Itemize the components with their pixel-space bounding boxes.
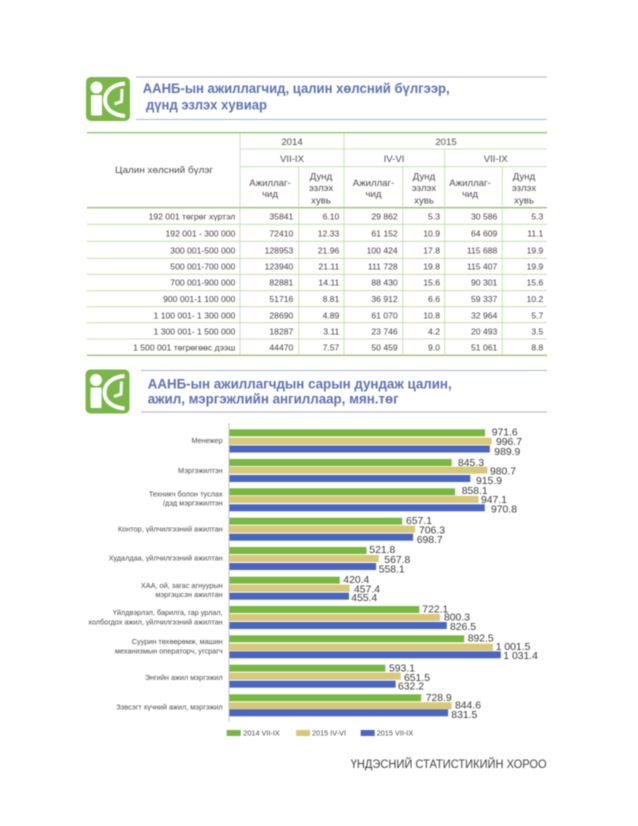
table header: Дунд (513, 171, 536, 182)
table rows: 9.0 (428, 343, 440, 353)
table rows: 19.9 (527, 262, 544, 272)
table header: 2014 (281, 137, 303, 148)
table rows: 19.8 (423, 262, 440, 272)
blue bars 2015 VII-IX (230, 446, 501, 716)
table header: Ажиллаг- (449, 178, 491, 189)
category labels: мэргэшсэн ажилтан (156, 590, 223, 599)
value labels: 826.5 (450, 622, 476, 633)
table header: IV-VI (384, 154, 404, 165)
table rows: 900 001-1 100 000 (163, 294, 236, 304)
table rows: 32 964 (471, 310, 498, 320)
table rows: 300 001-500 000 (170, 246, 236, 256)
tan bars 2015 IV-VI (230, 438, 493, 709)
category labels: холбогдох ажил, үйлчилгээний ажилтан (88, 618, 223, 626)
table header: Ажиллаг- (249, 178, 291, 189)
table header: чид (462, 189, 478, 200)
category labels: Менежер (191, 436, 223, 445)
table rows: 4.89 (323, 310, 340, 320)
category labels: Суурин төхөөрөмж, машин (132, 637, 223, 646)
wage bracket table (87, 133, 547, 355)
footer: source organisation: ҮНДЭСНИЙ СТАТИСТИКИЙН ХОРОО (351, 758, 547, 771)
value labels (343, 428, 538, 721)
value labels: 844.6 (455, 700, 481, 712)
table header: чид (262, 189, 278, 200)
table header: Дунд (413, 171, 436, 182)
value labels: 989.9 (494, 447, 521, 458)
table rows: 35841 (269, 212, 294, 222)
category labels: Үйлдвэрлэл, барилга, гар урлал, (113, 608, 223, 617)
table rows: 18287 (269, 326, 294, 336)
category labels: Худалдаа, үйлчилгээний ажилтан (109, 554, 223, 562)
table rows: 4.2 (428, 326, 440, 336)
value labels: 651.5 (404, 673, 430, 684)
table rows: 36 912 (371, 294, 398, 304)
table header: Дунд (310, 171, 333, 182)
table rows: 51716 (269, 294, 294, 304)
table rows: 72410 (269, 229, 294, 239)
category labels: ХАА, ой, загас агнуурын (141, 581, 223, 590)
value labels: 558.1 (379, 564, 405, 576)
table rows: 5.3 (531, 212, 544, 222)
category labels: Техникч болон туслах (149, 490, 223, 498)
table header: VII-IX (484, 154, 508, 165)
table header: хувь (414, 195, 434, 206)
value labels: 970.8 (491, 504, 517, 516)
title 1: ААНБ-ын ажиллагчид, цалин хөлсний бүлгээр, (143, 80, 450, 96)
table rows: 12.33 (318, 229, 340, 239)
table header: 2015 (435, 137, 457, 148)
logo icon 1 (86, 77, 130, 121)
table rows: 59 337 (471, 294, 498, 304)
table rows: 30 586 (471, 212, 498, 222)
table rows: 1 100 001- 1 300 000 (154, 310, 236, 320)
table rows: 500 001-700 000 (170, 262, 236, 272)
category labels: механизмын операторч, угсрагч (115, 646, 223, 656)
table rows: 700 001-900 000 (170, 278, 236, 288)
table rows: 6.10 (323, 212, 340, 222)
value labels: 800.3 (444, 612, 470, 624)
value labels: 593.1 (389, 664, 415, 674)
table rows (133, 212, 544, 353)
bar chart: wage by occupation (88, 423, 538, 738)
table header: Цалин хөлсний бүлэг (115, 165, 214, 176)
table rows: 3.5 (531, 326, 544, 336)
category labels: Мэргэжилтэн (178, 466, 223, 475)
table rows: 1 300 001- 1 500 000 (154, 326, 236, 336)
value labels: 947.1 (481, 495, 507, 506)
table header: эзлэх (512, 183, 536, 194)
value labels: 892.5 (468, 634, 494, 644)
value labels: 845.3 (458, 458, 484, 469)
table rows: 20 493 (471, 326, 498, 336)
value labels: 521.8 (369, 545, 396, 556)
value labels: 996.7 (496, 437, 522, 448)
value labels: 728.9 (426, 693, 452, 704)
legend (227, 729, 413, 738)
table rows: 64 609 (471, 229, 498, 239)
value labels: 698.7 (417, 535, 443, 546)
table rows: 192 001 төгрөг хүртэл (149, 212, 235, 222)
table header: Ажиллаг- (353, 178, 394, 189)
table rows: 8.8 (531, 343, 544, 353)
value labels: 657.1 (406, 516, 432, 527)
value labels: 831.5 (451, 710, 478, 721)
legend: 2015 VII-IX (377, 729, 413, 738)
table rows: 21.96 (318, 246, 340, 256)
value labels: 971.6 (492, 428, 518, 438)
table header: чид (366, 189, 382, 200)
table rows: 61 070 (371, 310, 398, 320)
table rows: 115 688 (467, 246, 498, 256)
legend: 2014 VII-IX (243, 729, 280, 738)
table rows: 6.6 (428, 294, 440, 304)
green bars 2014 VII-IX (230, 429, 485, 701)
table header: хувь (514, 195, 534, 206)
section heading: wages by bracket (86, 77, 547, 121)
table header (115, 137, 536, 206)
table rows: 115 407 (467, 262, 498, 272)
table rows: 90 301 (471, 278, 498, 288)
category labels: /дэд мэргэжилтэн (163, 498, 223, 508)
table rows: 21.11 (318, 262, 340, 272)
value labels: 455.4 (351, 593, 378, 604)
category labels: Зэвсэгт хүчний ажил, мэргэжил (116, 702, 223, 712)
table rows: 88 430 (371, 278, 398, 288)
table rows: 10.2 (527, 294, 544, 304)
title 2: ААНБ-ын ажиллагчдын сарын дундаж цалин, (148, 375, 452, 391)
table header: эзлэх (412, 183, 436, 194)
table rows: 14.11 (318, 278, 340, 288)
table header: хувь (311, 195, 331, 206)
table rows: 5.7 (531, 310, 544, 320)
table rows: 51 061 (471, 343, 498, 353)
table rows: 111 728 (368, 262, 398, 272)
category labels (88, 436, 223, 712)
table rows: 82881 (269, 278, 294, 288)
legend: 2015 IV-VI (312, 729, 346, 738)
value labels: 1 001.5 (496, 642, 531, 653)
category labels: Энгийн ажил мэргэжил (145, 673, 223, 682)
value labels: 567.8 (384, 555, 411, 566)
title 1: дүнд эзлэх хувиар (146, 96, 267, 112)
table rows: 28690 (269, 310, 294, 320)
title 2: ажил, мэргэжлийн ангиллаар, мян.төг (148, 391, 399, 407)
table header: эзлэх (309, 183, 333, 194)
table rows: 15.6 (423, 278, 440, 288)
value labels: 457.4 (354, 584, 380, 596)
table rows: 123940 (265, 262, 294, 272)
table rows: 61 152 (371, 229, 398, 239)
table rows: 5.3 (428, 212, 440, 222)
table rows: 3.11 (323, 326, 340, 336)
table header: VII-IX (280, 154, 305, 165)
value labels: 980.7 (490, 466, 516, 478)
table rows: 192 001 - 300 000 (166, 229, 236, 239)
table rows: 17.8 (423, 246, 440, 256)
value labels: 1 031.4 (503, 651, 538, 662)
value labels: 722.1 (422, 604, 449, 616)
value labels: 706.3 (419, 526, 445, 536)
table rows: 19.9 (527, 246, 544, 256)
value labels: 420.4 (343, 575, 370, 586)
section heading: average monthly wage (86, 370, 547, 414)
table rows: 8.81 (323, 294, 340, 304)
table rows: 44470 (269, 343, 294, 353)
table rows: 29 862 (371, 212, 398, 222)
table rows: 1 500 001 төгрөгөөс дээш (133, 343, 235, 353)
value labels: 915.9 (476, 476, 502, 487)
table rows: 15.6 (527, 278, 544, 288)
table rows: 128953 (265, 246, 294, 256)
logo icon 2 (86, 370, 130, 414)
table rows: 50 459 (371, 343, 398, 353)
table rows: 10.9 (423, 229, 440, 239)
table rows: 11.1 (527, 229, 544, 239)
category labels: Контор, үйлчилгээний ажилтан (118, 524, 223, 534)
value labels: 858.1 (462, 486, 488, 497)
value labels: 632.2 (398, 682, 424, 692)
table rows: 100 424 (367, 246, 398, 256)
table rows: 10.8 (423, 310, 440, 320)
table rows: 7.57 (323, 343, 340, 353)
table rows: 23 746 (371, 326, 398, 336)
